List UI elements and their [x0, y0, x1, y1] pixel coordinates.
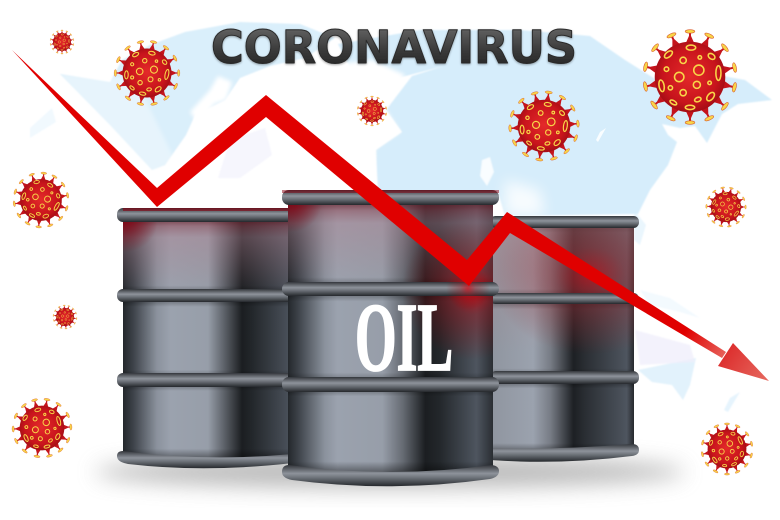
icon: virus centre	[504, 86, 584, 166]
label: OIL: OIL	[355, 284, 453, 392]
arrow: falling oil price line	[12, 50, 769, 381]
barrel: right	[493, 216, 639, 462]
icon: virus upper left	[108, 34, 186, 112]
icon: virus top right large	[643, 30, 737, 124]
icon: virus top left small	[50, 30, 74, 54]
icon: virus left lower small	[50, 302, 80, 332]
icon: virus bottom left	[5, 391, 79, 465]
title: CORONAVIRUS	[211, 21, 577, 74]
map land gaps	[58, 60, 606, 216]
barrel: centre	[282, 190, 499, 486]
world map	[30, 22, 772, 412]
icon: virus top centre small	[357, 96, 387, 126]
icon: virus right middle	[697, 178, 755, 236]
barrel: left	[117, 208, 288, 468]
icon: virus bottom right	[692, 414, 762, 484]
icon: virus left middle	[3, 162, 79, 238]
ground shadow	[95, 456, 685, 488]
